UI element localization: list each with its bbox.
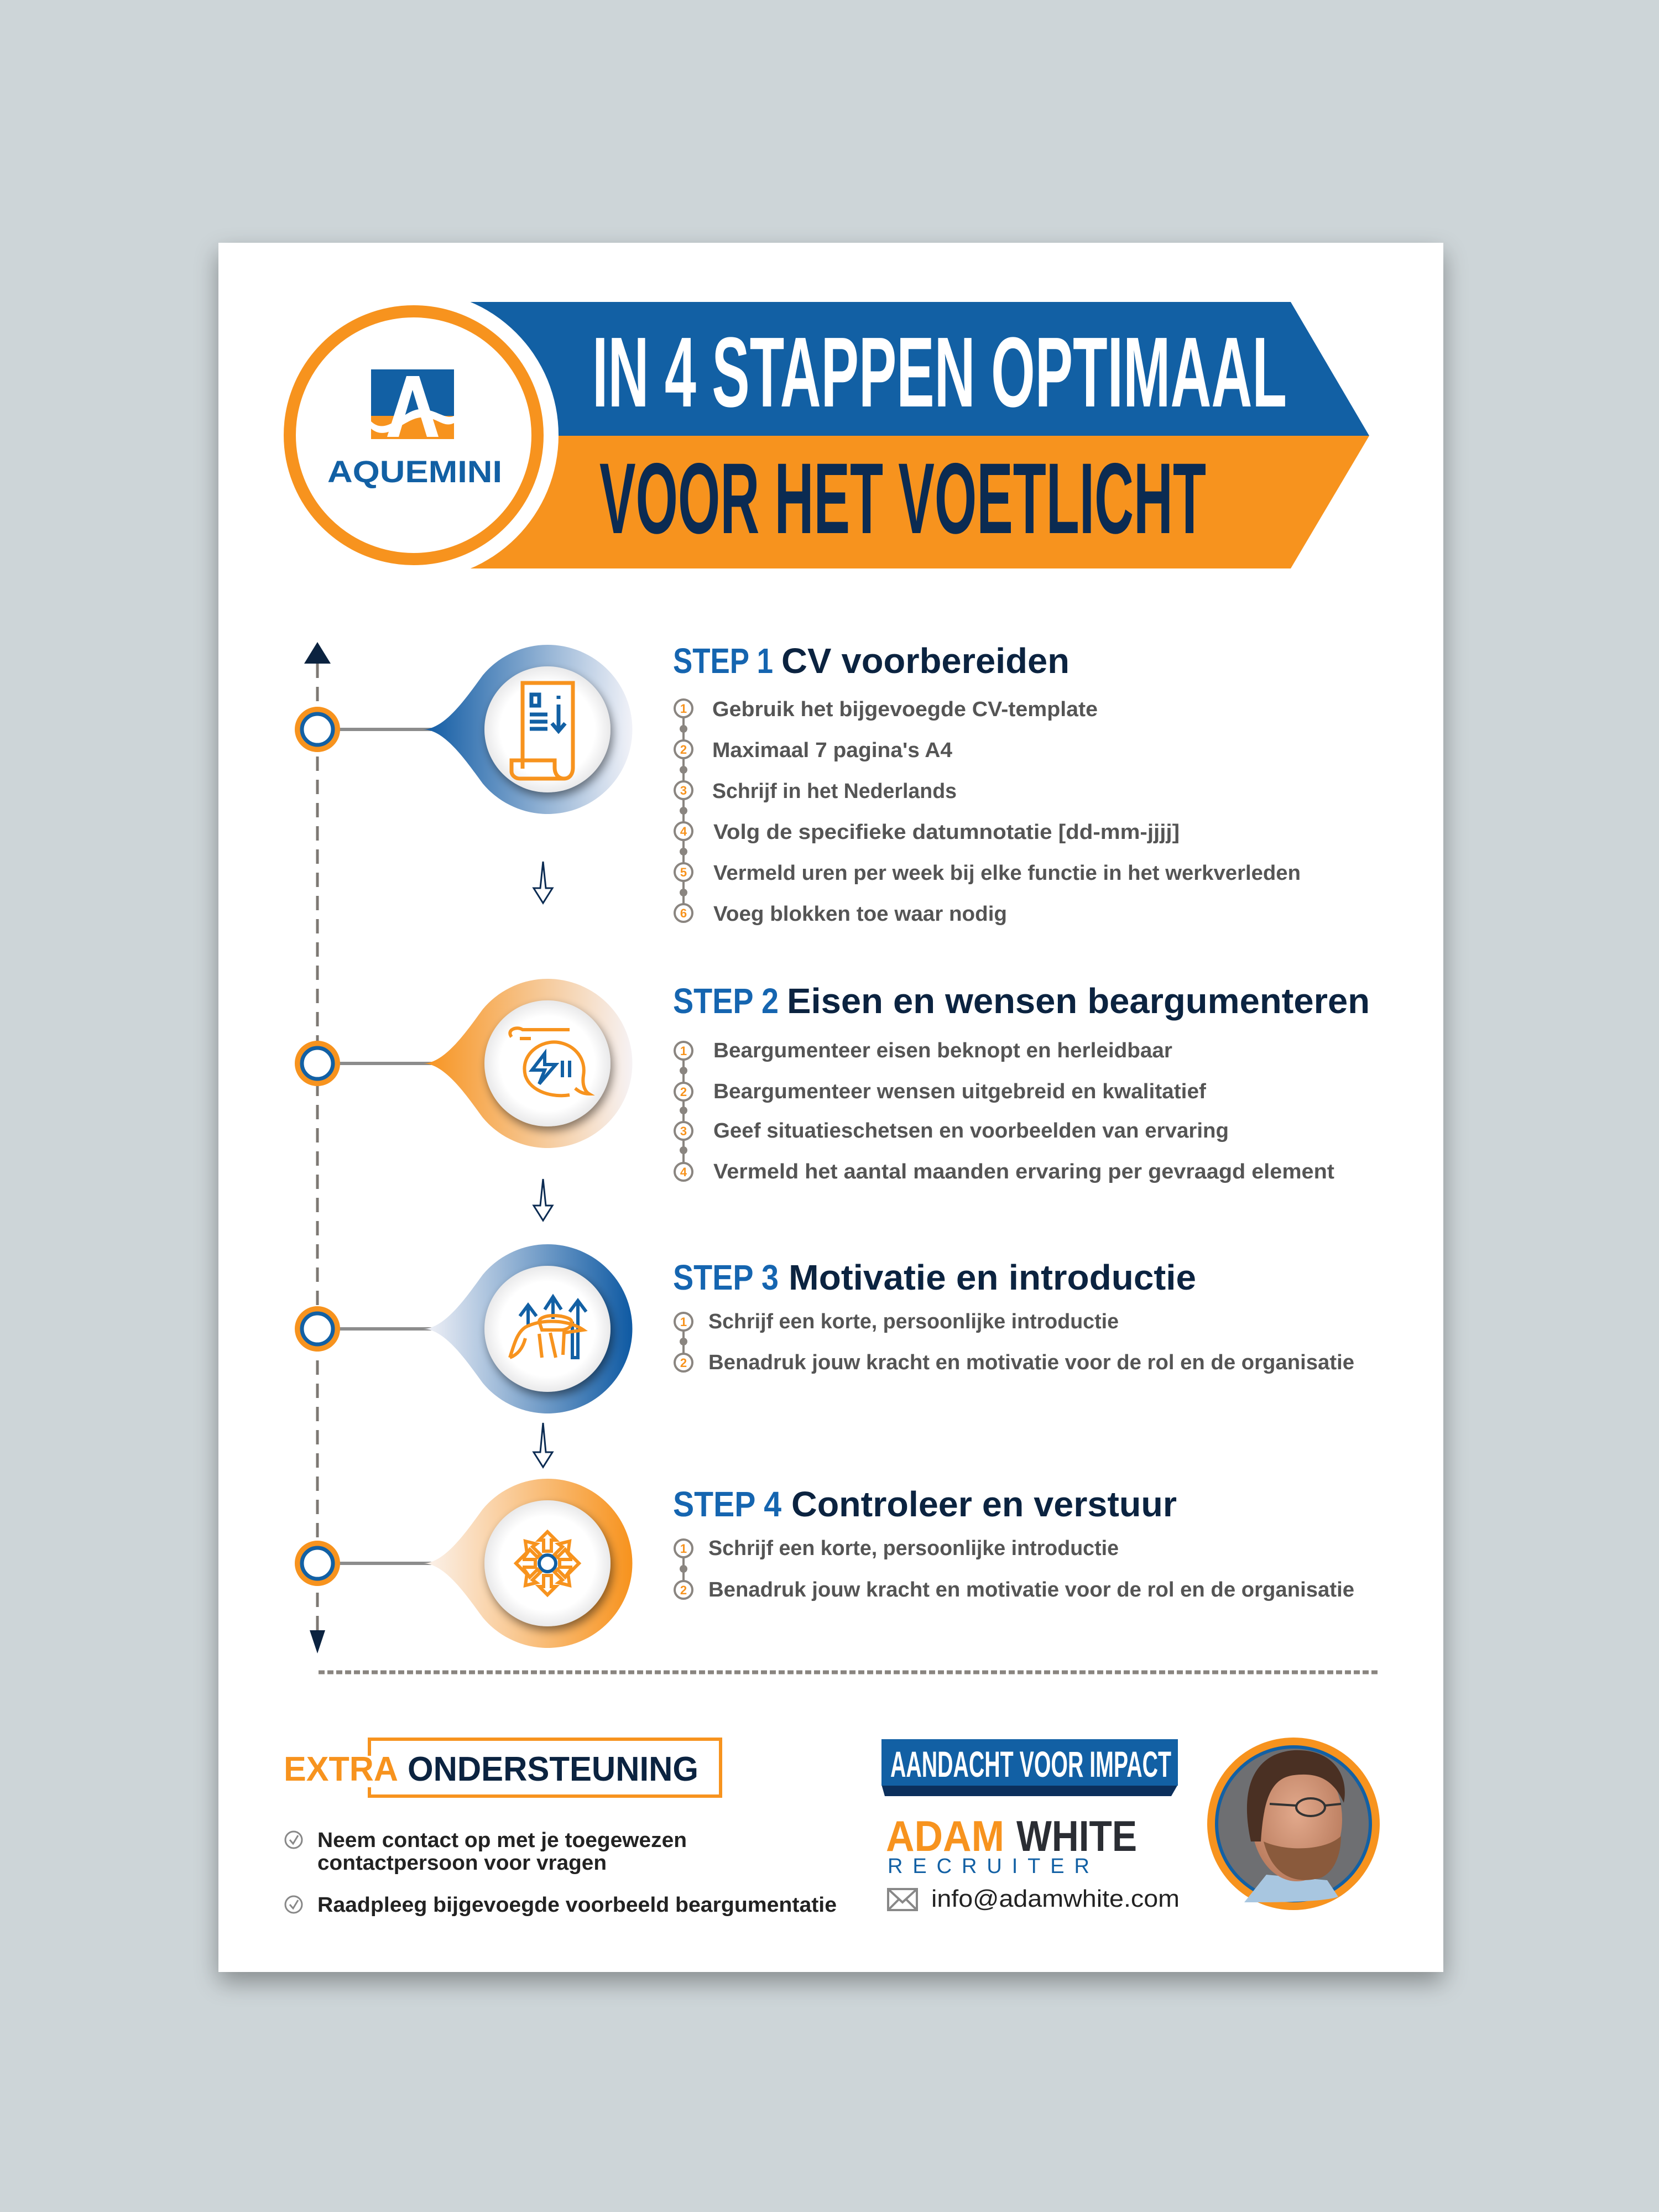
poster sheet [218, 243, 1443, 1972]
list: 4 [680, 825, 687, 838]
list: 3 [680, 1124, 687, 1138]
icon: speech bubble lightning [510, 1028, 589, 1095]
list: Volg de specifieke datumnotatie [dd-mm-jjjj] [713, 821, 1180, 844]
list: Benadruk jouw kracht en motivatie voor de rol en de organisatie [708, 1351, 1354, 1374]
list: 2 [680, 743, 687, 757]
contact: adam white: info@adamwhite.com [931, 1885, 1180, 1912]
list: Schrijf een korte, persoonlijke introductie [708, 1310, 1119, 1333]
list: Beargumenteer wensen uitgebreid en kwalitatief [713, 1080, 1206, 1103]
extra ondersteuning list: Neem contact op met je toegewezen [317, 1829, 687, 1852]
step 2 text [1, 1, 1370, 1183]
list: Geef situatieschetsen en voorbeelden van ervaring [713, 1119, 1229, 1142]
heading: STEP 4 [673, 1484, 781, 1524]
list: 4 [680, 1165, 687, 1179]
list: Benadruk jouw kracht en motivatie voor de rol en de organisatie [708, 1578, 1354, 1601]
list: Voeg blokken toe waar nodig [713, 902, 1007, 926]
list [675, 698, 1301, 926]
step 3 text: Motivatie en introductie [789, 1258, 1196, 1297]
portrait photo [1207, 1738, 1380, 1910]
arrow 2 to 3 [534, 1179, 552, 1220]
step 2 node and bubble [298, 979, 632, 1148]
icon: arrows outward [516, 1532, 579, 1595]
icon: envelope [888, 1889, 917, 1910]
list [675, 1537, 1354, 1601]
step 4 text [673, 1484, 1354, 1601]
icon: cv document [512, 683, 573, 779]
step 3 node and bubble [298, 1244, 632, 1413]
contact: adam white [886, 1812, 1180, 1912]
icon: check [285, 1832, 302, 1848]
list: 2 [680, 1583, 687, 1597]
list: Vermeld uren per week bij elke functie in het werkverleden [713, 862, 1301, 885]
list: 3 [680, 784, 687, 797]
list: 1 [680, 1315, 687, 1329]
header banner [269, 290, 1369, 580]
logo ring [290, 311, 538, 559]
list: 1 [680, 1542, 687, 1556]
step 4 node and bubble [298, 1479, 632, 1648]
list: Beargumenteer eisen beknopt en herleidbaar [713, 1039, 1172, 1062]
list: Gebruik het bijgevoegde CV-template [712, 698, 1098, 721]
extra ondersteuning list: Raadpleeg bijgevoegde voorbeeld beargumentatie [317, 1893, 837, 1917]
extra ondersteuning list: contactpersoon voor vragen [317, 1851, 607, 1875]
step 3 text [673, 1258, 1354, 1374]
step 1 text: CV voorbereiden [781, 641, 1070, 681]
blue band [465, 302, 1369, 436]
extra ondersteuning heading: EXTRA [284, 1750, 398, 1788]
list: 1 [680, 702, 687, 716]
orange band [465, 436, 1369, 568]
step 1 text [673, 641, 1301, 926]
extra ondersteuning heading [284, 1739, 721, 1796]
arrow 1 to 2 [534, 862, 552, 903]
arrow 3 to 4 [534, 1423, 552, 1467]
list: 2 [680, 1356, 687, 1370]
extra ondersteuning list [285, 1829, 837, 1917]
list: 2 [680, 1085, 687, 1099]
heading: STEP 2 [673, 981, 779, 1021]
contact: adam white: WHITE [1016, 1812, 1137, 1860]
extra ondersteuning heading: ONDERSTEUNING [408, 1750, 698, 1788]
step 4 text: Controleer en verstuur [791, 1484, 1177, 1524]
aandacht voor impact badge: AANDACHT VOOR IMPACT [890, 1744, 1171, 1785]
list: Vermeld het aantal maanden ervaring per gevraagd element [713, 1160, 1334, 1183]
list: Maximaal 7 pagina's A4 [712, 739, 952, 762]
heading: STEP 3 [673, 1258, 779, 1297]
aandacht voor impact badge [881, 1739, 1178, 1796]
step 2 text: Eisen en wensen beargumenteren [787, 981, 1370, 1021]
list: Schrijf een korte, persoonlijke introductie [708, 1537, 1119, 1560]
list [675, 1310, 1354, 1374]
bottom dashed divider [319, 1670, 1380, 1674]
timeline vertical dashed line [304, 642, 331, 1653]
list [1, 1, 1334, 1183]
list: Schrijf in het Nederlands [712, 780, 957, 803]
list: 6 [680, 906, 687, 920]
list: 1 [680, 1044, 687, 1058]
logo: aquemini [327, 369, 502, 489]
icon: fist with arrows [510, 1297, 586, 1358]
heading: STEP 1 [673, 641, 773, 681]
contact: adam white: RECRUITER [888, 1855, 1089, 1878]
logo: aquemini: AQUEMINI [327, 454, 502, 489]
step 1 node and bubble [298, 645, 632, 814]
list: 5 [680, 865, 687, 879]
contact: adam white: ADAM [886, 1812, 1004, 1860]
